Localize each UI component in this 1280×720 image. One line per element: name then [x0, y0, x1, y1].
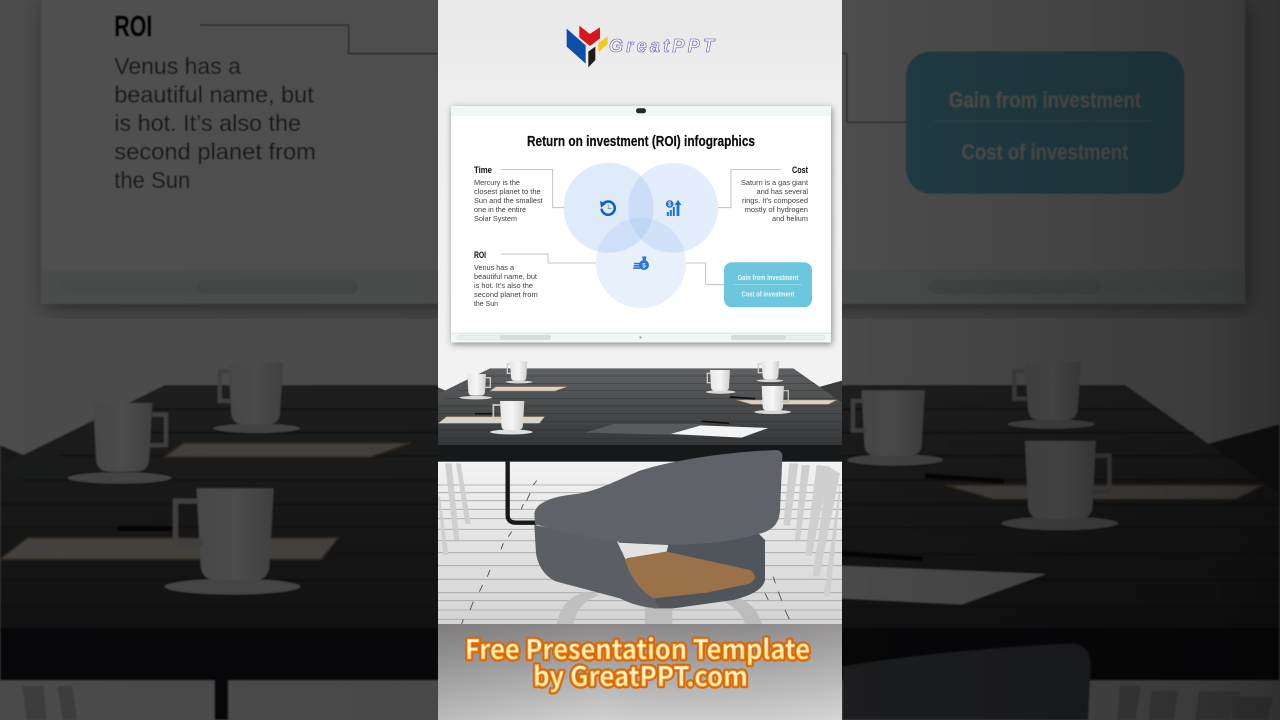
body: roi	[474, 263, 538, 308]
body: roi: the Sun	[474, 299, 498, 308]
background callout box: Cost of investment	[962, 140, 1129, 165]
text block: roi	[474, 250, 538, 308]
display bottom bezel	[451, 332, 831, 342]
background connector lines	[200, 25, 906, 122]
background text: Venus	[114, 53, 316, 193]
caption line 2: by GreatPPT.com	[533, 655, 748, 694]
body: roi: beautiful name, but	[474, 272, 537, 281]
table leg	[508, 462, 537, 523]
title: Return on investment (ROI) infographics	[527, 134, 755, 150]
caption line 1: Free Presentation Template	[465, 628, 810, 667]
chair	[534, 450, 782, 624]
background text: Venus: second planet from	[114, 138, 316, 164]
bottom band side shading	[438, 624, 842, 720]
body: time: Sun and the smallest	[474, 196, 543, 205]
body: time	[474, 178, 543, 223]
logo: GreatPPT	[567, 26, 716, 67]
background text: Venus: the Sun	[114, 167, 190, 193]
icon: clock with return arrow	[600, 201, 615, 215]
icon: money bag with coins	[633, 256, 649, 270]
background text: Venus: Venus has a	[114, 53, 241, 79]
callout: ROI formula: Gain from investment	[738, 275, 799, 282]
logo wordmark: GreatPPT	[609, 36, 716, 56]
bottom caption band	[438, 624, 842, 720]
body: cost	[741, 178, 808, 223]
circle: cost	[628, 163, 718, 253]
venn diagram	[564, 163, 718, 308]
caption line 1: Free Presentation Template	[465, 628, 810, 667]
camera	[636, 108, 646, 113]
body: roi: second planet from	[474, 290, 538, 299]
icon: rising revenue chart	[666, 200, 682, 216]
body: cost: rings. It’s composed	[742, 196, 808, 205]
icon: money bag with coins: $	[642, 264, 646, 270]
text block: cost	[741, 165, 808, 223]
body: time: closest planet to the	[474, 187, 541, 196]
background heading: ROI: ROI	[114, 11, 152, 43]
circle: time	[564, 163, 654, 253]
heading: roi: ROI	[474, 250, 486, 260]
panel: slide on wall display	[451, 106, 831, 342]
body: roi: Venus has a	[474, 263, 514, 272]
body: time: Mercury is the	[474, 178, 520, 187]
logo mark	[567, 26, 608, 67]
circle: roi	[596, 218, 686, 308]
connector lines	[501, 170, 781, 285]
body: roi: is hot. It’s also the	[474, 281, 533, 290]
body: cost: and helium	[772, 214, 808, 223]
center photo: meeting room with table and chair	[438, 0, 842, 624]
background text: Venus: beautiful name, but	[114, 81, 314, 107]
far chair legs	[438, 463, 840, 597]
icon: rising revenue chart: $	[668, 202, 672, 208]
callout: ROI formula	[724, 262, 812, 307]
background callout box: Gain from investment	[949, 87, 1142, 112]
body: cost: and has several	[757, 187, 808, 196]
body: time: Solar System	[474, 214, 517, 223]
text block: time	[474, 165, 543, 223]
callout: ROI formula: Cost of investment	[742, 292, 795, 298]
body: cost: mostly of hydrogen	[745, 205, 808, 214]
body: time: one in the entire	[474, 205, 526, 214]
background text: Venus: is hot. It’s also the	[114, 110, 301, 136]
display top bezel	[451, 106, 831, 116]
heading: cost: Cost	[792, 165, 808, 175]
background callout box	[906, 51, 1184, 194]
wall	[438, 0, 842, 463]
background enlarged slide	[41, 0, 1245, 303]
caption line 2: by GreatPPT.com	[533, 655, 748, 694]
table with papers and cups	[438, 361, 842, 462]
heading: time: Time	[474, 165, 492, 175]
slide background	[451, 106, 831, 342]
floor with planks	[438, 462, 842, 624]
body: cost: Saturn is a gas giant	[741, 178, 808, 187]
caption: free presentation template	[465, 628, 810, 694]
